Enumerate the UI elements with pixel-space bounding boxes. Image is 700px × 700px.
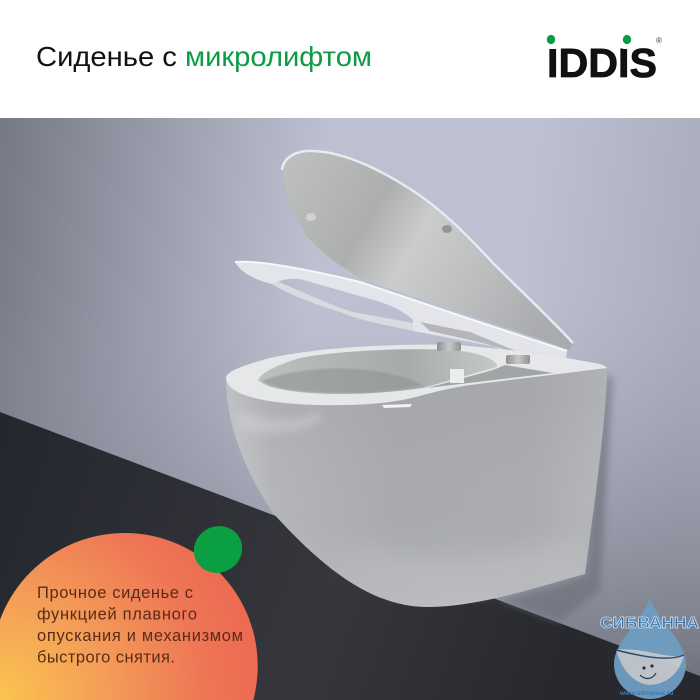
highlight on bowl base: [340, 540, 580, 589]
seat lower band: [272, 281, 500, 346]
seat upper band: [235, 262, 567, 360]
bowl inside: [258, 349, 497, 394]
floor: [0, 412, 700, 700]
green blob: [185, 517, 251, 582]
header background: [0, 0, 700, 118]
callout text: функцией плавного: [37, 606, 197, 624]
toilet bowl body: [226, 345, 607, 607]
logo: IDDIS: ®: [656, 36, 662, 45]
watermark: Sibvanna: СИБВАННА: [600, 615, 699, 632]
flat shaded deck right of bowl: [427, 365, 553, 388]
watermark: Sibvanna: www.sibvanna.ru: [619, 690, 673, 697]
watermark: Sibvanna: [600, 598, 699, 699]
title: Сиденье с микролифтом: [36, 41, 372, 72]
wall shadow beside bowl: [500, 372, 612, 622]
toilet lid: [282, 151, 573, 350]
orange gradient circle: [0, 533, 258, 700]
bowl rim: [226, 345, 607, 405]
hinges: [437, 342, 461, 351]
shading on left curve: [236, 410, 320, 433]
toilet seat: [235, 262, 567, 360]
callout text: опускания и механизмом: [37, 627, 243, 645]
callout text: Прочное сиденье с: [37, 584, 193, 602]
logo: IDDIS: IDDIS: [547, 40, 657, 86]
callout text: быстрого снятия.: [37, 648, 175, 666]
